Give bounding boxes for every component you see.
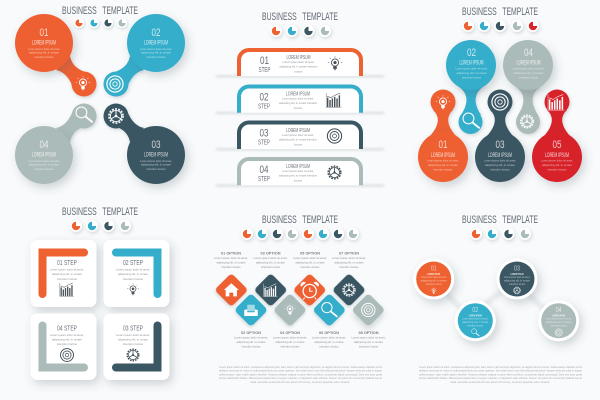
step 05 red drop: Lorem ipsum dolor sit amet,	[541, 158, 573, 162]
step tab 04: LOREM IPSUM	[286, 164, 310, 170]
diamond: chart	[254, 273, 288, 307]
option 01 label: 01 OPTION	[221, 252, 241, 256]
option 06 label: adipiscing elit, in ornare	[314, 340, 344, 344]
heading: business template: BUSINESS TEMPLATE	[62, 5, 138, 17]
step tab 03: LOREM IPSUM	[286, 128, 310, 134]
step tab 02: luctus	[294, 106, 303, 110]
icon: gear	[127, 349, 139, 361]
legend dots	[70, 220, 131, 232]
step 01 orange drop: Lorem ipsum dolor sit amet,	[427, 158, 459, 162]
diamond: target	[351, 293, 385, 327]
legend dots	[462, 20, 539, 32]
step tab 01: LOREM IPSUM	[286, 55, 311, 61]
step 04 grey: LOREM IPSUM	[32, 152, 56, 158]
icon: bar chart	[60, 283, 74, 296]
step 02 blue: 02	[152, 27, 160, 39]
legend dots	[241, 228, 359, 240]
step tab 03: Lorem ipsum dolor sit amet,	[282, 133, 314, 137]
option 02 label: adipiscing elit, in ornare	[236, 340, 266, 344]
icon: bulb	[328, 56, 342, 70]
option 04 label: 04 OPTION	[280, 331, 300, 335]
step 03 dark drop: LOREM IPSUM	[488, 153, 512, 159]
panel: eight option diamonds	[214, 214, 386, 384]
step 04 grey drop: LOREM IPSUM	[516, 60, 540, 66]
circle 02 blue	[455, 300, 496, 341]
step tab 03: luctus	[294, 142, 303, 146]
option 01 label: Lorem ipsum dolor sit amet,	[214, 256, 248, 260]
step tab 01: 01	[260, 55, 269, 67]
option 04 label: adipiscing elit, in ornare	[276, 340, 305, 344]
card 01 step: Lorem ipsum dolor sit amet,	[50, 268, 84, 272]
legend dots	[74, 18, 127, 28]
step 04 grey drop	[503, 40, 553, 134]
step 05 red drop	[532, 90, 582, 182]
card 02 step: 02 STEP	[123, 258, 143, 267]
circle 04 grey: interdum luctus	[551, 325, 567, 328]
option 05 label: adipiscing elit, in ornare	[296, 260, 325, 264]
option 08 label	[352, 331, 386, 348]
panel: four-lobed metaball steps	[15, 5, 185, 184]
icon: gear	[109, 109, 123, 123]
heading: business template: BUSINESS TEMPLATE	[462, 6, 538, 18]
step 04 grey: adipiscing elit, in ornare	[29, 163, 59, 167]
step tab 04: 04	[260, 164, 268, 176]
circle 02 blue: adipiscing elit, in ornare	[462, 321, 489, 324]
legend dots	[270, 25, 331, 37]
footer paragraph: pellentesque, eget mollis sapien facilisis. Vivamus aliquet magna sit amet libero pretium, id pulvinar ligula consequat. Duis sed ante porta	[419, 373, 583, 376]
option 08 label: Lorem ipsum dolor sit amet,	[352, 336, 386, 340]
option 08 label: interdum luctus	[359, 344, 378, 348]
step 04 grey	[15, 104, 96, 184]
step 02 blue: interdum luctus	[146, 55, 166, 59]
step 04 grey drop: Lorem ipsum dolor sit amet,	[512, 66, 545, 70]
diamond: home	[214, 273, 248, 307]
panel: four ringed circles	[413, 214, 583, 384]
step 01 orange: Lorem ipsum dolor sit amet,	[28, 47, 60, 51]
card 04 step: Lorem ipsum dolor sit amet,	[50, 333, 84, 337]
card 01 step	[30, 240, 96, 307]
card 02 step	[104, 240, 170, 307]
icon: bar chart	[326, 93, 341, 107]
step 03 dark: LOREM IPSUM	[144, 152, 168, 158]
step 03 dark: Lorem ipsum dolor sit amet,	[140, 159, 172, 163]
diamond: bulb	[273, 293, 307, 327]
step 03 dark: 03	[152, 139, 160, 151]
diamond: magnifier	[312, 293, 346, 327]
footer paragraph: Lorem ipsum dolor sit amet, consectetur adipiscing elit. Nam dictum nisl vel turpis dignissim, at sagittis dui fermentum. Pellentesque habitant morbi	[419, 366, 582, 369]
circle 02 blue: LOREM IPSUM	[469, 314, 482, 318]
step 05 red drop: interdum luctus	[548, 168, 567, 172]
heading: business template: BUSINESS TEMPLATE	[262, 214, 338, 226]
step tab 02: LOREM IPSUM	[286, 92, 310, 98]
icon: magnifier	[76, 107, 92, 122]
step tab 01: Lorem ipsum dolor sit amet,	[282, 60, 315, 64]
option 08 label: adipiscing elit, in ornare	[354, 340, 383, 344]
option 07 label: adipiscing elit, in ornare	[334, 260, 364, 264]
step 01 orange: interdum luctus	[34, 55, 54, 59]
step 05 red drop: adipiscing elit, in ornare	[542, 163, 572, 167]
card 04 step: adipiscing elit, in ornare	[52, 338, 82, 342]
option 06 label	[312, 331, 346, 348]
circle 01 orange: Lorem ipsum dolor sit amet,	[421, 276, 447, 279]
icon: target	[492, 94, 508, 110]
step 03 dark drop: interdum luctus	[490, 168, 510, 172]
step 03 dark drop: Lorem ipsum dolor sit amet,	[484, 158, 516, 162]
card 02 step: adipiscing elit, in ornare	[118, 272, 148, 276]
step 03 dark drop	[475, 90, 525, 182]
connector curve	[434, 279, 559, 321]
step tab 04	[216, 159, 384, 186]
card 01 step: adipiscing elit, in ornare	[52, 272, 82, 276]
step 04 grey: interdum luctus	[34, 167, 54, 171]
step tab 03: STEP	[258, 138, 270, 146]
step 02 blue drop: 02	[467, 47, 476, 59]
card 01 step: 01 STEP	[57, 258, 77, 267]
step 02 blue drop: interdum luctus	[462, 76, 481, 80]
card 03 step: Lorem ipsum dolor sit amet,	[116, 333, 150, 337]
option 06 label: 06 OPTION	[319, 331, 339, 335]
option 03 label: adipiscing elit, in ornare	[256, 260, 285, 264]
option 07 label: 07 OPTION	[339, 252, 359, 256]
circle 01 orange: 01	[431, 266, 437, 272]
circle 03 dark: interdum luctus	[509, 283, 526, 286]
step 01 orange: adipiscing elit, in ornare	[29, 51, 59, 55]
step 01 orange drop: adipiscing elit, in ornare	[428, 163, 458, 167]
option 05 label	[293, 252, 327, 269]
card 03 step: interdum luctus	[123, 342, 143, 346]
option 01 label	[214, 252, 248, 269]
option 02 label: interdum luctus	[242, 344, 261, 348]
option 06 label: Lorem ipsum dolor sit amet,	[312, 336, 346, 340]
step 05 red drop: LOREM IPSUM	[545, 153, 569, 159]
step tab 04: STEP	[258, 174, 270, 183]
footer paragraph	[219, 366, 383, 384]
step 02 blue drop: LOREM IPSUM	[460, 60, 484, 66]
step tab 01: luctus	[294, 70, 303, 74]
option 02 label: Lorem ipsum dolor sit amet,	[234, 336, 268, 340]
option 01 label: interdum luctus	[222, 265, 241, 269]
panel: stacked step tabs	[216, 11, 384, 186]
circle 03 dark: Lorem ipsum dolor sit amet,	[504, 276, 530, 279]
option 03 label: interdum luctus	[261, 265, 280, 269]
panel: five drop steps	[418, 6, 582, 182]
step 03 dark drop: 03	[496, 139, 504, 151]
card 03 step: 03 STEP	[123, 324, 143, 332]
icon: gear	[328, 166, 341, 179]
option 06 label: interdum luctus	[320, 344, 339, 348]
step tab 02: adipiscing elit, in ornare interdum	[279, 101, 317, 105]
step 01 orange drop: interdum luctus	[434, 168, 453, 172]
step 02 blue drop: Lorem ipsum dolor sit amet,	[456, 66, 488, 70]
step 02 blue drop	[446, 40, 496, 134]
option 04 label: Lorem ipsum dolor sit amet,	[273, 336, 307, 340]
circle 01 orange: adipiscing elit, in ornare	[421, 280, 447, 282]
card 03 step	[104, 314, 170, 380]
option 05 label: 05 OPTION	[300, 252, 320, 256]
option 02 label: 02 OPTION	[241, 331, 261, 335]
icon: target	[61, 349, 73, 361]
step tab 02	[216, 86, 384, 114]
circle 04 grey	[538, 300, 579, 341]
icon: bar chart	[548, 94, 565, 110]
footer paragraph: lectus sollicitudin finibus. Maecenas feugiat tortor at quam volutpat, ut dignissim odio ultricies. Donec vel purus ac nisl tempor blandit sed et	[419, 377, 582, 380]
step tab 01: adipiscing elit, in ornare interdum	[280, 64, 318, 68]
icon: bulb	[436, 95, 450, 109]
legend dots	[470, 228, 531, 240]
step tab 04: adipiscing elit, in ornare interdum	[279, 174, 317, 178]
icon: magnifier	[472, 329, 479, 336]
option 04 label: interdum luctus	[280, 344, 300, 348]
icon: gear	[521, 115, 533, 128]
circle 04 grey: LOREM IPSUM	[552, 314, 565, 318]
icon: bulb	[127, 283, 139, 295]
option 07 label: Lorem ipsum dolor sit amet,	[332, 256, 366, 260]
step 02 blue: adipiscing elit, in ornare	[141, 51, 171, 55]
circle 01 orange	[413, 258, 454, 300]
step tab 02: STEP	[258, 102, 270, 110]
heading: business template: BUSINESS TEMPLATE	[62, 206, 138, 218]
footer paragraph: Lorem ipsum dolor sit amet, consectetur adipiscing elit. Nam dictum nisl vel turpis dignissim, at sagittis dui fermentum. Pellentesque habitant morbi	[219, 366, 382, 369]
panel: four square cards	[30, 206, 170, 380]
footer paragraph: pellentesque, eget mollis sapien facilisis. Vivamus aliquet magna sit amet libero pretium, id pulvinar ligula consequat. Duis sed ante porta	[219, 373, 383, 376]
circle 04 grey: Lorem ipsum dolor sit amet,	[546, 318, 572, 321]
step 05 red drop: 05	[552, 139, 562, 151]
diamond: alarm clock	[293, 273, 327, 307]
step 03 dark	[104, 104, 185, 184]
circle 02 blue: 02	[472, 307, 478, 314]
step 01 orange	[15, 14, 96, 96]
step 03 dark drop: adipiscing elit, in ornare	[485, 163, 515, 167]
icon: magnifier	[463, 113, 479, 128]
option 07 label: interdum luctus	[340, 265, 359, 269]
footer paragraph: lectus sollicitudin finibus. Maecenas feugiat tortor at quam volutpat, ut dignissim odio ultricies. Donec vel purus ac nisl tempor blandit sed et	[219, 377, 382, 380]
card 04 step: 04 STEP	[57, 324, 77, 332]
option 08 label: 08 OPTION	[358, 331, 379, 335]
card 02 step: Lorem ipsum dolor sit amet,	[116, 268, 150, 272]
step 04 grey drop: adipiscing elit, in ornare	[514, 71, 544, 75]
step tab 04: luctus	[294, 178, 303, 182]
option 05 label: Lorem ipsum dolor sit amet,	[293, 256, 327, 260]
circle 01 orange: LOREM IPSUM	[427, 272, 440, 276]
circle 03 dark	[496, 258, 538, 300]
option 04 label	[273, 331, 307, 348]
step tab 03	[216, 122, 384, 150]
circle 03 dark: adipiscing elit, in ornare	[504, 280, 531, 282]
card 02 step: interdum luctus	[123, 277, 143, 281]
circle 01 orange: interdum luctus	[426, 283, 442, 286]
card 04 step: interdum luctus	[57, 342, 77, 346]
step 01 orange: LOREM IPSUM	[32, 40, 56, 46]
heading: business template: BUSINESS TEMPLATE	[262, 11, 338, 23]
footer paragraph	[419, 366, 583, 384]
step 04 grey: 04	[40, 139, 48, 151]
card 04 step	[30, 314, 96, 380]
step tab 01: STEP	[258, 65, 270, 74]
circle 03 dark: LOREM IPSUM	[510, 272, 524, 276]
option 07 label	[332, 252, 366, 269]
card 01 step: interdum luctus	[57, 277, 77, 281]
circle 04 grey: adipiscing elit, in ornare	[546, 321, 572, 324]
footer paragraph: tristique senectus et netus et malesuada fames ac turpis egestas. Sed vitae lorem non nibh placerat tincidunt. Integer vehicula nulla in augue	[219, 370, 383, 373]
step 03 dark: adipiscing elit, in ornare	[141, 163, 171, 167]
step 02 blue: LOREM IPSUM	[144, 40, 168, 46]
step 01 orange drop: 01	[438, 139, 448, 151]
icon: target	[555, 329, 562, 336]
step 02 blue drop: adipiscing elit, in ornare	[456, 71, 487, 75]
diamond: gear	[332, 273, 366, 307]
option 05 label: interdum luctus	[300, 265, 320, 269]
step tab 03: adipiscing elit, in ornare interdum	[279, 138, 317, 142]
circle 03 dark: 03	[514, 266, 520, 272]
circle 04 grey: 04	[556, 307, 562, 314]
option 02 label	[234, 331, 268, 348]
step 01 orange drop	[418, 90, 468, 182]
step 04 grey drop: 04	[524, 47, 533, 59]
step tab 01	[216, 50, 384, 77]
footer paragraph: tristique senectus et netus et malesuada fames ac turpis egestas. Sed vitae lorem non nibh placerat tincidunt. Integer vehicula nulla in augue	[419, 370, 583, 373]
option 01 label: adipiscing elit, in ornare	[216, 260, 246, 264]
icon: bulb	[76, 76, 90, 90]
option 03 label	[254, 252, 288, 269]
step 01 orange drop: LOREM IPSUM	[431, 153, 455, 159]
icon: gear	[514, 287, 520, 294]
option 03 label: Lorem ipsum dolor sit amet,	[254, 256, 288, 260]
step 04 grey drop: interdum luctus	[519, 76, 538, 80]
step tab 03: 03	[260, 128, 268, 140]
footer paragraph: nulla. Aenean euismod elit non ipsum rhoncus, sit amet gravida nunc viverra.	[450, 381, 550, 384]
step 03 dark: interdum luctus	[146, 167, 166, 171]
icon: bulb	[430, 287, 437, 294]
step 04 grey: Lorem ipsum dolor sit amet,	[28, 159, 60, 163]
step tab 02: 02	[260, 92, 268, 104]
step tab 04: Lorem ipsum dolor sit amet,	[282, 169, 314, 173]
icon: target	[107, 76, 123, 92]
circle 02 blue: Lorem ipsum dolor sit amet,	[462, 318, 489, 321]
step 02 blue	[104, 14, 185, 96]
footer paragraph: nulla. Aenean euismod elit non ipsum rhoncus, sit amet gravida nunc viverra.	[250, 381, 350, 384]
step 02 blue: Lorem ipsum dolor sit amet,	[140, 47, 172, 51]
circle 02 blue: interdum luctus	[467, 325, 484, 328]
icon: target	[327, 129, 342, 143]
option 03 label: 03 OPTION	[260, 252, 281, 256]
step tab 02: Lorem ipsum dolor sit amet,	[282, 96, 314, 100]
diamond: mail	[234, 293, 268, 327]
card 03 step: adipiscing elit, in ornare	[118, 338, 148, 342]
heading: business template: BUSINESS TEMPLATE	[462, 214, 538, 226]
step 01 orange: 01	[40, 27, 48, 39]
